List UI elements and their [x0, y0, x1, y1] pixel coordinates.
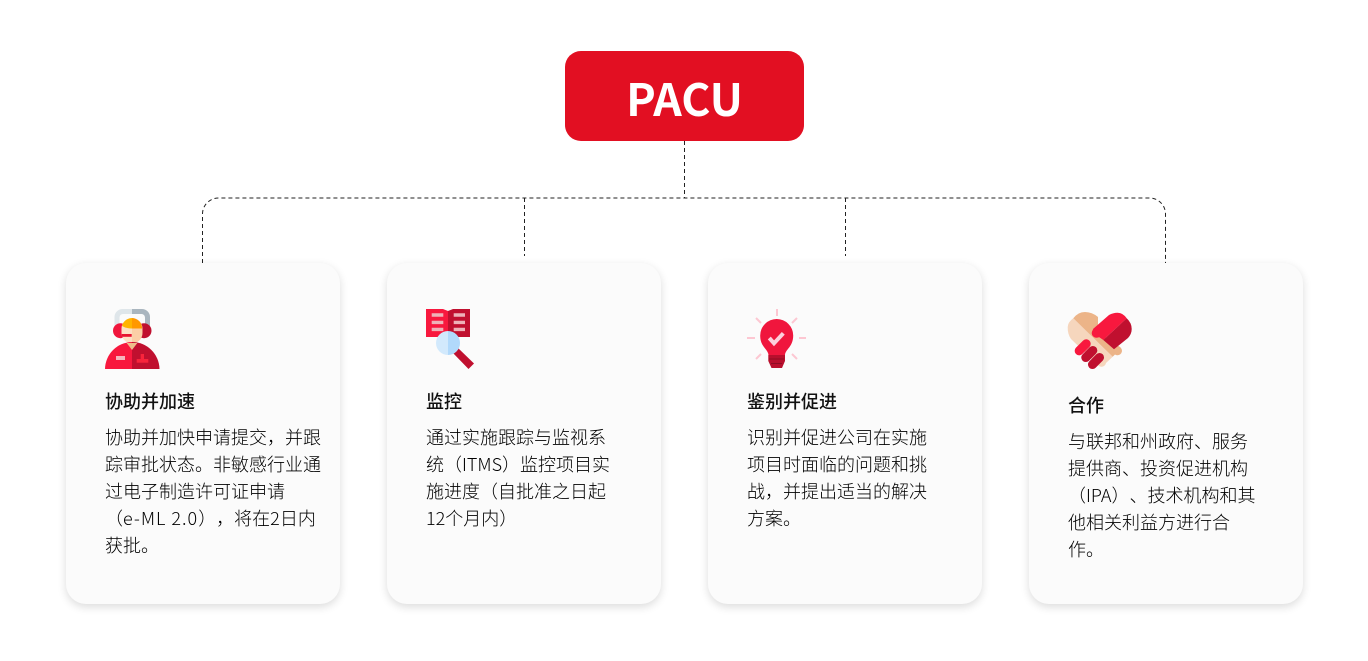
body text: 识别并促进公司在实施: [747, 424, 927, 450]
icon: support agent: [105, 309, 160, 369]
title box: PACU: PACU: [626, 64, 743, 129]
body text: [747, 424, 927, 531]
body text: 与联邦和州政府、服务: [1068, 428, 1248, 454]
icon: light bulb: [747, 309, 806, 368]
body text: [1068, 428, 1256, 562]
icon: handshake heart: [1068, 312, 1132, 369]
body text: 战，并提出适当的解决: [747, 478, 927, 504]
body text: 协助并加快申请提交，并跟: [105, 424, 321, 450]
body text: 他相关利益方进行合: [1068, 509, 1230, 535]
panel: identify and promote: [708, 263, 982, 604]
body text: 作。: [1068, 536, 1104, 562]
heading: 合作: [1068, 392, 1104, 418]
body text: （IPA）、技术机构和其: [1068, 482, 1256, 508]
panel: monitoring: [387, 263, 661, 604]
panel: cooperation: [1029, 263, 1303, 604]
body text: 提供商、投资促进机构: [1068, 455, 1248, 481]
body text: 12个月内）: [426, 505, 517, 531]
body text: 踪审批状态。非敏感行业通: [105, 451, 321, 477]
panel: assist and expedite: [66, 263, 340, 604]
body text: 方案。: [747, 505, 801, 531]
body text: 通过实施跟踪与监视系: [426, 424, 606, 450]
title box: PACU: [565, 51, 804, 141]
body text: 项目时面临的问题和挑: [747, 451, 927, 477]
body text: [105, 424, 321, 558]
heading: 鉴别并促进: [747, 388, 837, 414]
heading: 协助并加速: [105, 388, 195, 414]
heading: 监控: [426, 388, 462, 414]
body text: 统（ITMS）监控项目实: [426, 451, 610, 477]
body text: 获批。: [105, 532, 159, 558]
body text: 过电子制造许可证申请: [105, 478, 285, 504]
body text: [426, 424, 610, 531]
body text: 施进度（自批准之日起: [426, 478, 606, 504]
icon: book and magnifier: [426, 309, 474, 369]
body text: （e-ML 2.0），将在2日内: [105, 505, 316, 531]
